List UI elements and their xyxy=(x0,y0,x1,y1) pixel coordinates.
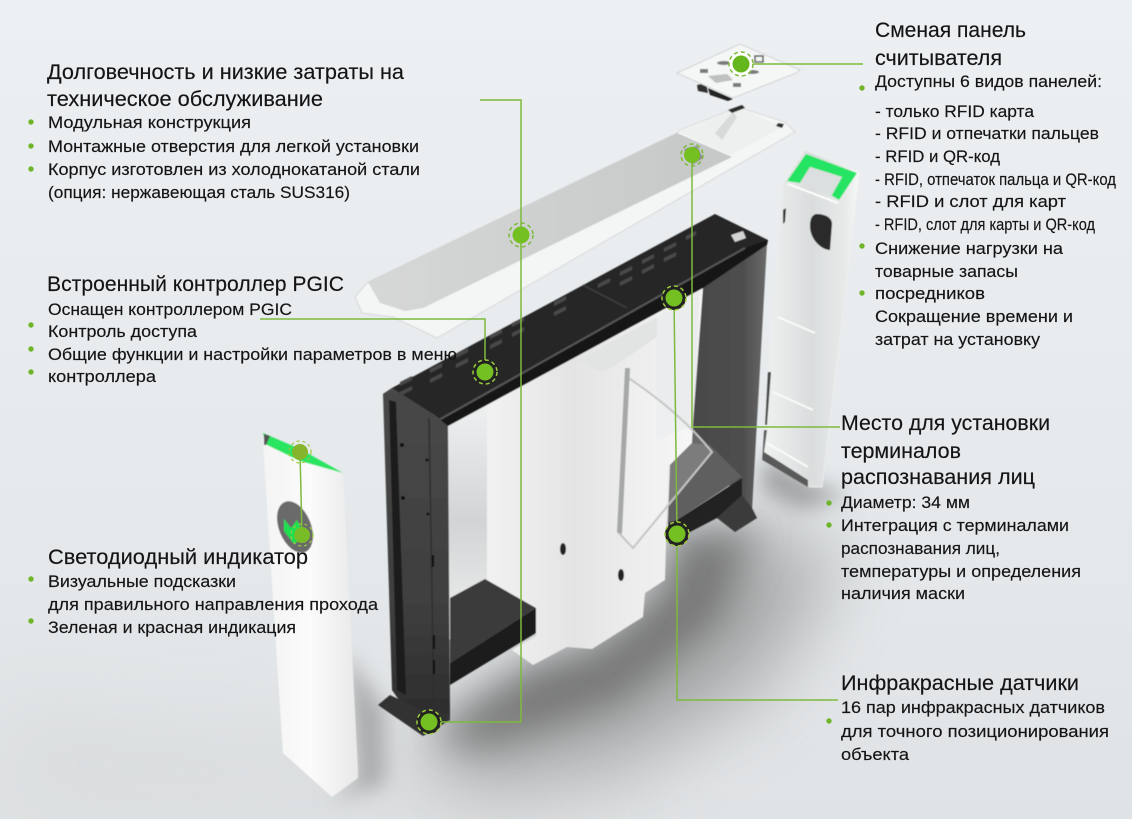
bullets: face terminal mount xyxy=(826,500,832,528)
right door panel xyxy=(762,150,860,487)
heading: LED indicator: Светодиодный индикатор xyxy=(48,546,308,569)
callout lines xyxy=(260,64,863,722)
callout marker: durability xyxy=(509,223,533,247)
body: face terminal mount: Диаметр: 34 мм xyxy=(841,494,970,512)
body: face terminal mount: распознавания лиц, xyxy=(841,540,1000,558)
top cover xyxy=(355,105,795,338)
body: reader panel: - RFID и слот для карт xyxy=(875,193,1066,211)
floor shadows xyxy=(0,455,850,819)
body: reader panel: Снижение нагрузки на xyxy=(875,240,1064,258)
body: controller: Общие функции и настройки параметров в меню xyxy=(48,346,457,364)
callout marker: IR sensors lower xyxy=(665,522,689,546)
callout marker: terminal mount xyxy=(681,144,703,166)
central white cabinet xyxy=(487,285,703,665)
text block: reader panel xyxy=(859,19,1116,349)
text block: LED indicator xyxy=(28,546,379,637)
body: durability: Модульная конструкция xyxy=(48,114,251,132)
body: durability: Корпус изготовлен из холоднокатаной стали xyxy=(48,161,420,179)
text block: infrared sensors xyxy=(826,672,1109,764)
callout marker: reader xyxy=(729,52,753,76)
body: infrared sensors: 16 пар инфракрасных датчиков xyxy=(841,699,1105,717)
heading: reader panel xyxy=(875,19,1026,70)
reader panel xyxy=(677,44,800,101)
heading: face terminal mount: распознавания лиц xyxy=(841,466,1035,489)
glass flap xyxy=(617,368,712,548)
bullets: reader panel xyxy=(859,85,865,296)
heading: face terminal mount: Место для установки xyxy=(841,412,1050,435)
body: controller: контроллера xyxy=(48,368,157,386)
illustration: turnstile assembly xyxy=(263,44,860,797)
body: face terminal mount: Интеграция с терминалами xyxy=(841,517,1069,535)
back wall inside frame xyxy=(448,402,487,640)
body: reader panel: - RFID и QR-код xyxy=(875,148,1000,166)
body: infrared sensors: объекта xyxy=(841,746,910,764)
body: reader panel: - RFID и отпечатки пальцев xyxy=(875,125,1099,143)
body: reader panel: Сокращение времени и xyxy=(875,308,1073,326)
text block: face terminal mount xyxy=(826,412,1081,603)
heading: reader panel: считывателя xyxy=(875,47,1002,70)
body: LED indicator: для правильного направления прохода xyxy=(48,596,379,614)
body: reader panel xyxy=(875,73,1116,349)
body: durability: (опция: нержавеющая сталь SUS316) xyxy=(48,184,350,202)
body: reader panel: затрат на установку xyxy=(875,331,1041,349)
callout marker: IR sensors upper xyxy=(662,286,686,310)
heading: infrared sensors: Инфракрасные датчики xyxy=(841,672,1079,695)
heading: durability: Долговечность и низкие затраты на xyxy=(47,61,404,84)
text block: controller xyxy=(28,273,457,386)
body: reader panel: посредников xyxy=(875,285,985,303)
right pillar and base xyxy=(668,243,767,535)
heading: face terminal mount: терминалов xyxy=(841,440,961,463)
body: reader panel: Доступны 6 видов панелей: xyxy=(875,73,1102,91)
bullets: durability xyxy=(28,119,34,172)
body: controller xyxy=(48,301,457,386)
heading: durability xyxy=(47,61,404,111)
body: face terminal mount: температуры и определения xyxy=(841,563,1081,581)
body: LED indicator: Зеленая и красная индикация xyxy=(48,619,296,637)
body: face terminal mount xyxy=(841,494,1081,603)
bullets: LED indicator xyxy=(28,576,34,624)
callout marker: LED top xyxy=(289,441,311,463)
heading: face terminal mount xyxy=(841,412,1050,489)
bullet: infrared sensors xyxy=(826,718,832,724)
body: infrared sensors xyxy=(841,699,1109,764)
body: durability xyxy=(48,114,420,202)
bullets: controller xyxy=(28,322,34,375)
left door panel xyxy=(263,433,358,797)
body: infrared sensors: для точного позиционирования xyxy=(841,723,1109,741)
body: durability: Монтажные отверстия для легкой установки xyxy=(48,138,419,156)
body: reader panel: товарные запасы xyxy=(875,263,1018,281)
body: face terminal mount: наличия маски xyxy=(841,585,965,603)
body: reader panel: - только RFID карта xyxy=(875,103,1035,121)
heading: reader panel: Сменая панель xyxy=(875,19,1026,42)
left pillar and base xyxy=(378,388,450,736)
dark frame top beam xyxy=(383,214,768,426)
lower left shelf xyxy=(450,579,536,685)
body: LED indicator xyxy=(48,573,379,637)
body: controller: Оснащен контроллером PGIC xyxy=(48,301,292,319)
text block: durability xyxy=(28,61,420,202)
heading: controller: Встроенный контроллер PGIC xyxy=(47,273,344,296)
callout marker: controller xyxy=(473,360,497,384)
callout marker: base xyxy=(417,710,441,734)
callout marker: LED arrow xyxy=(291,524,313,546)
body: LED indicator: Визуальные подсказки xyxy=(48,573,236,591)
heading: durability: техническое обслуживание xyxy=(47,88,323,111)
body: controller: Контроль доступа xyxy=(48,323,198,341)
body: reader panel: - RFID, слот для карты и QR-код xyxy=(875,216,1095,234)
